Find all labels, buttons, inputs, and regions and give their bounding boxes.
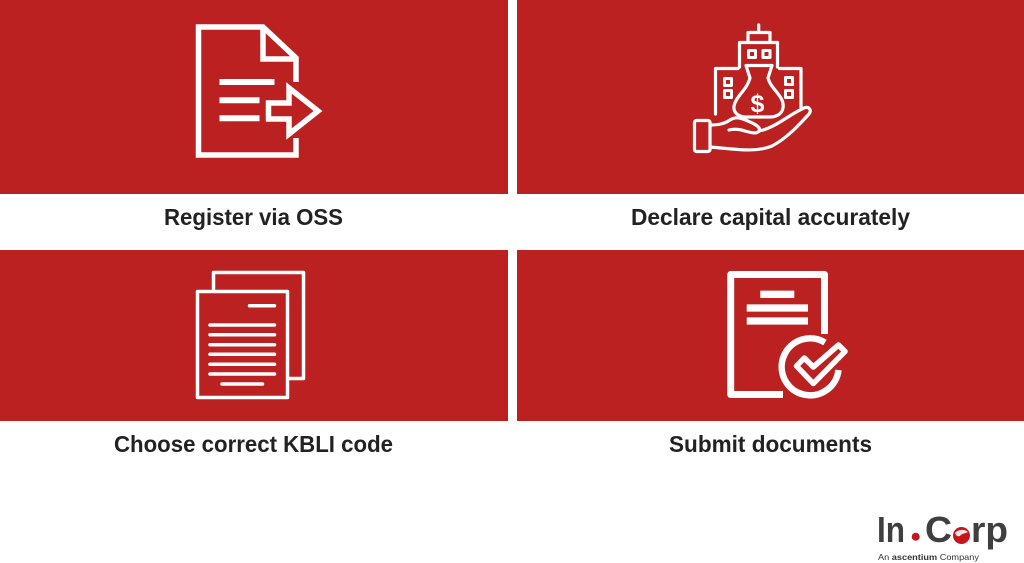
- caption: submit documents: Submit documents: [669, 431, 872, 457]
- panel: declare capital: [517, 0, 1024, 194]
- panel: submit documents: [517, 250, 1024, 421]
- logo: InCorp: rp: [971, 509, 1008, 550]
- logo: InCorp: [877, 509, 1008, 562]
- caption: declare capital accurately: Declare capital accurately: [631, 204, 910, 230]
- logo: InCorp: In: [877, 509, 905, 550]
- icon: stacked documents: [198, 272, 304, 398]
- caption: register via OSS: Register via OSS: [164, 204, 343, 230]
- icon: document with check mark: [731, 274, 845, 395]
- panel: register via OSS: [0, 0, 508, 194]
- logo: InCorp: C: [925, 509, 952, 550]
- icon: document with arrow: [198, 27, 318, 155]
- panel: choose KBLI code: [0, 250, 508, 421]
- icon: hand holding money bag and buildings: [694, 25, 810, 152]
- dollar sign: $: [751, 90, 765, 118]
- caption: choose correct KBLI code: Choose correct KBLI code: [114, 431, 393, 457]
- logo: InCorp: An ascentium Company: [878, 552, 980, 562]
